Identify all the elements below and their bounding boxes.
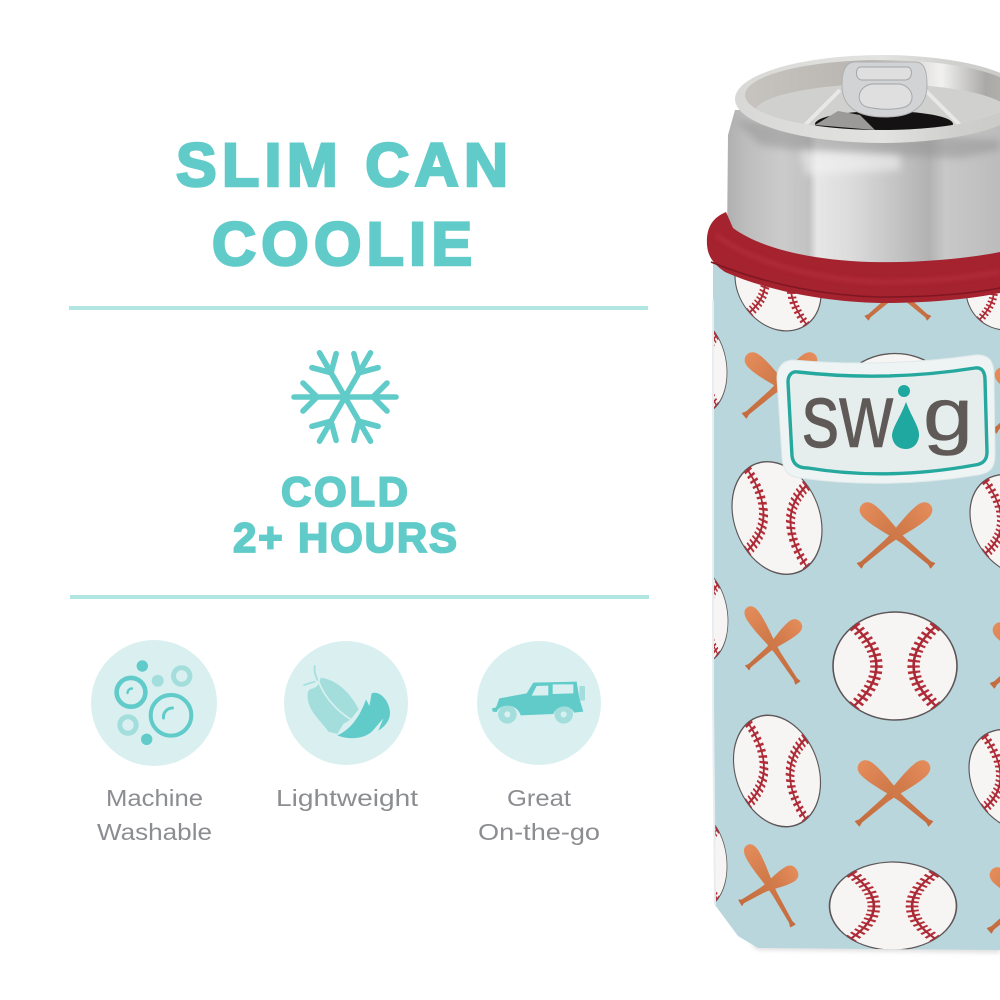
label: great on-the-go: Great <box>507 785 572 811</box>
can lid <box>756 85 1000 126</box>
label: machine washable: Washable <box>97 819 212 845</box>
label: lightweight: Lightweight <box>276 785 419 811</box>
feature: great on-the-go <box>477 641 601 845</box>
label: machine washable: Machine <box>106 785 203 811</box>
title: SLIM CAN <box>176 131 508 199</box>
swig wordmark <box>802 365 973 467</box>
icon: bubbles <box>117 660 191 745</box>
coolie sleeve <box>712 262 1000 954</box>
icon: snowflake <box>294 346 396 448</box>
title: COOLIE <box>212 210 472 278</box>
title <box>176 131 508 278</box>
baseball pattern <box>714 276 1000 950</box>
label: great on-the-go: On-the-go <box>478 819 600 845</box>
can rim <box>735 55 1000 143</box>
icon: feather <box>304 666 390 738</box>
swig logo patch <box>777 355 995 483</box>
swig wordmark: g <box>923 373 973 456</box>
heading: cold 2+ hours: 2+ HOURS <box>233 514 457 561</box>
can pull tab <box>842 62 927 117</box>
product: can in coolie <box>706 55 1000 954</box>
feature: machine washable <box>91 640 217 845</box>
swig wordmark: sw <box>802 365 893 467</box>
label: great on-the-go <box>478 785 600 845</box>
icon: jeep <box>492 682 585 724</box>
feature: lightweight <box>276 641 419 811</box>
patch teal border <box>788 368 987 474</box>
label: machine washable <box>97 785 212 845</box>
red collar <box>707 212 1000 303</box>
can body <box>727 110 1000 270</box>
heading: cold 2+ hours <box>233 468 457 561</box>
heading: cold 2+ hours: COLD <box>281 468 408 515</box>
